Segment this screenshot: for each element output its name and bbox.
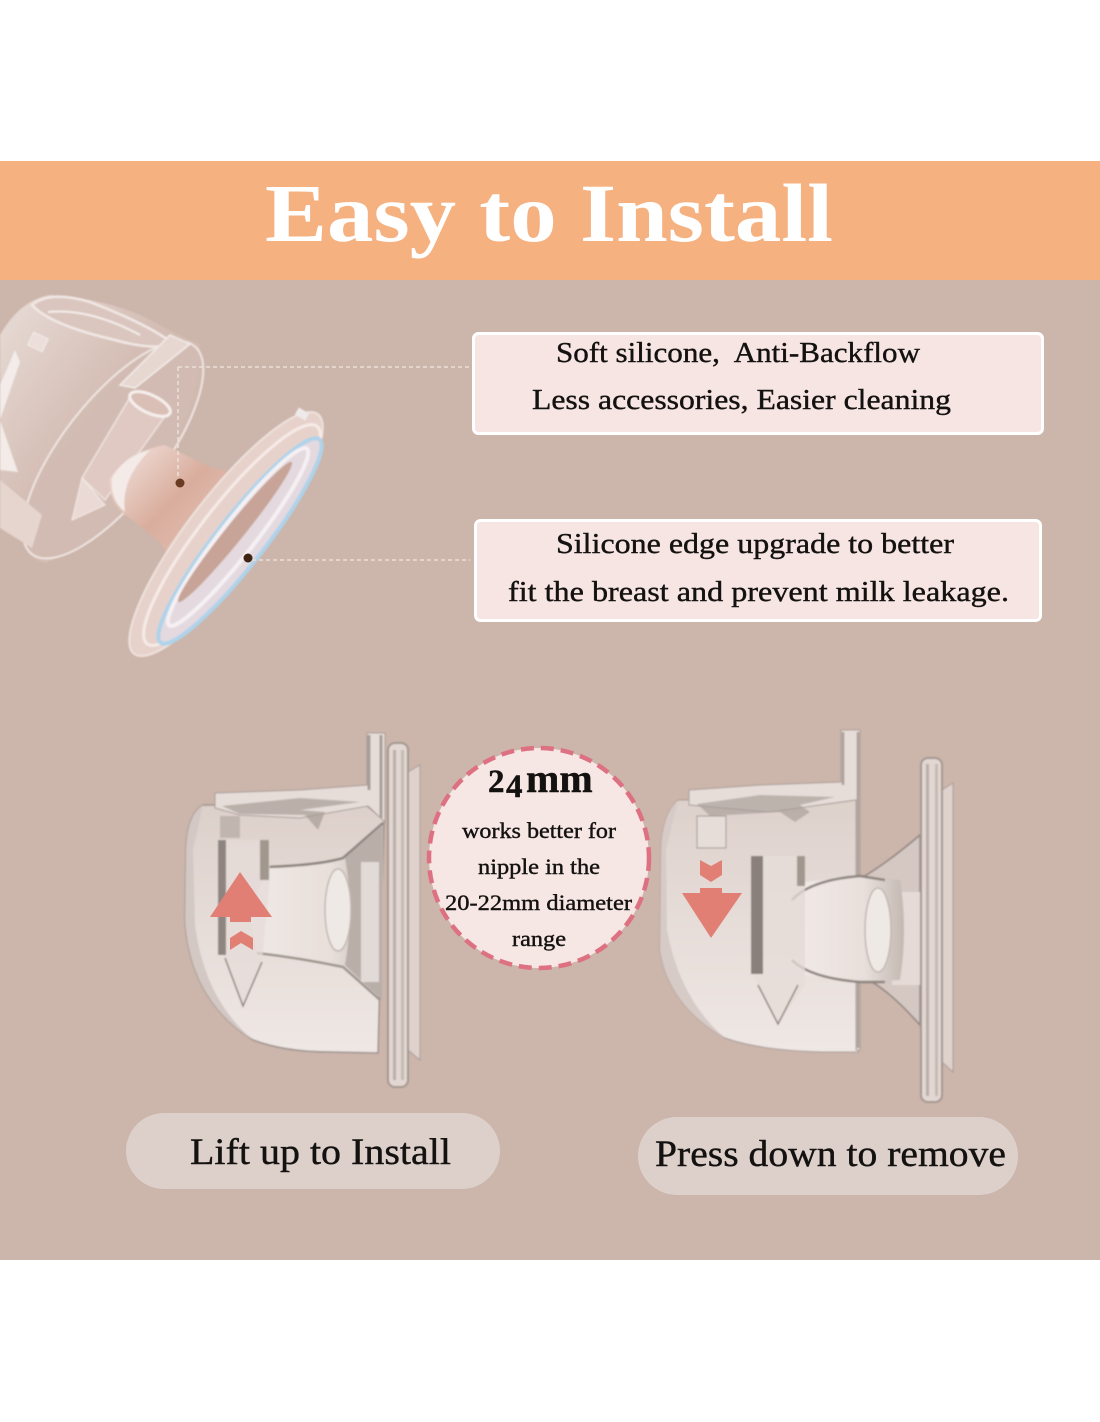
back flange bbox=[942, 783, 953, 1072]
valve nozzle bbox=[218, 840, 270, 1007]
valve nozzle bbox=[751, 856, 805, 1025]
back flange bbox=[408, 765, 420, 1060]
funnel stem bbox=[805, 876, 904, 982]
product photo: angled cup and flange bbox=[0, 295, 348, 677]
top plate bbox=[215, 733, 385, 822]
callout box: silicone edge: fit the breast and prevent milk leakage. bbox=[508, 576, 1009, 608]
arrow: press down bbox=[682, 860, 742, 938]
size badge: mm bbox=[526, 756, 593, 801]
cup body bbox=[185, 805, 384, 1053]
size badge: 20-22mm diameter bbox=[445, 890, 633, 915]
page background bbox=[0, 280, 1100, 1260]
size badge: works better for bbox=[462, 818, 617, 843]
callout box: silicone edge bbox=[476, 520, 1040, 620]
cup rim top bbox=[32, 297, 175, 347]
front ring bbox=[921, 758, 942, 1102]
label: lift up to install bbox=[126, 1113, 500, 1189]
feeding tube bbox=[82, 394, 168, 500]
size badge: range bbox=[512, 926, 566, 951]
blue inner ring bbox=[142, 425, 338, 657]
title: Easy to Install bbox=[265, 167, 833, 259]
callout box: silicone edge: Silicone edge upgrade to better bbox=[556, 528, 954, 560]
top plate bbox=[689, 730, 860, 1050]
title banner bbox=[0, 161, 1100, 280]
flange bbox=[104, 391, 348, 677]
label: press down to remove bbox=[638, 1117, 1018, 1195]
callout box: silicone and cleaning: Soft silicone, Anti-Backflow bbox=[556, 337, 920, 369]
air channel bbox=[697, 816, 726, 848]
arrow: lift up bbox=[210, 872, 272, 950]
neck bbox=[110, 445, 240, 580]
front ring bbox=[388, 743, 408, 1087]
product photo: removed cup, pressed down bbox=[660, 730, 953, 1102]
funnel bell bbox=[858, 835, 920, 1025]
callout box: silicone and cleaning bbox=[474, 334, 1042, 434]
label: lift up to install: Lift up to Install bbox=[190, 1132, 451, 1173]
product photo: installed cup, lifted bbox=[185, 733, 420, 1087]
callout box: silicone and cleaning: Less accessories, Easier cleaning bbox=[532, 384, 951, 416]
size badge: 2 bbox=[488, 764, 504, 800]
cup body bbox=[0, 295, 200, 563]
callout connector: top bbox=[176, 367, 470, 488]
size badge bbox=[429, 748, 649, 968]
callout connector: bottom bbox=[244, 554, 470, 562]
flange opening bbox=[171, 456, 299, 608]
funnel bbox=[250, 823, 383, 1000]
size badge: 4 bbox=[506, 769, 522, 805]
size badge: nipple in the bbox=[478, 854, 600, 879]
cup body bbox=[660, 790, 858, 1052]
label: press down to remove: Press down to remove bbox=[655, 1134, 1006, 1175]
